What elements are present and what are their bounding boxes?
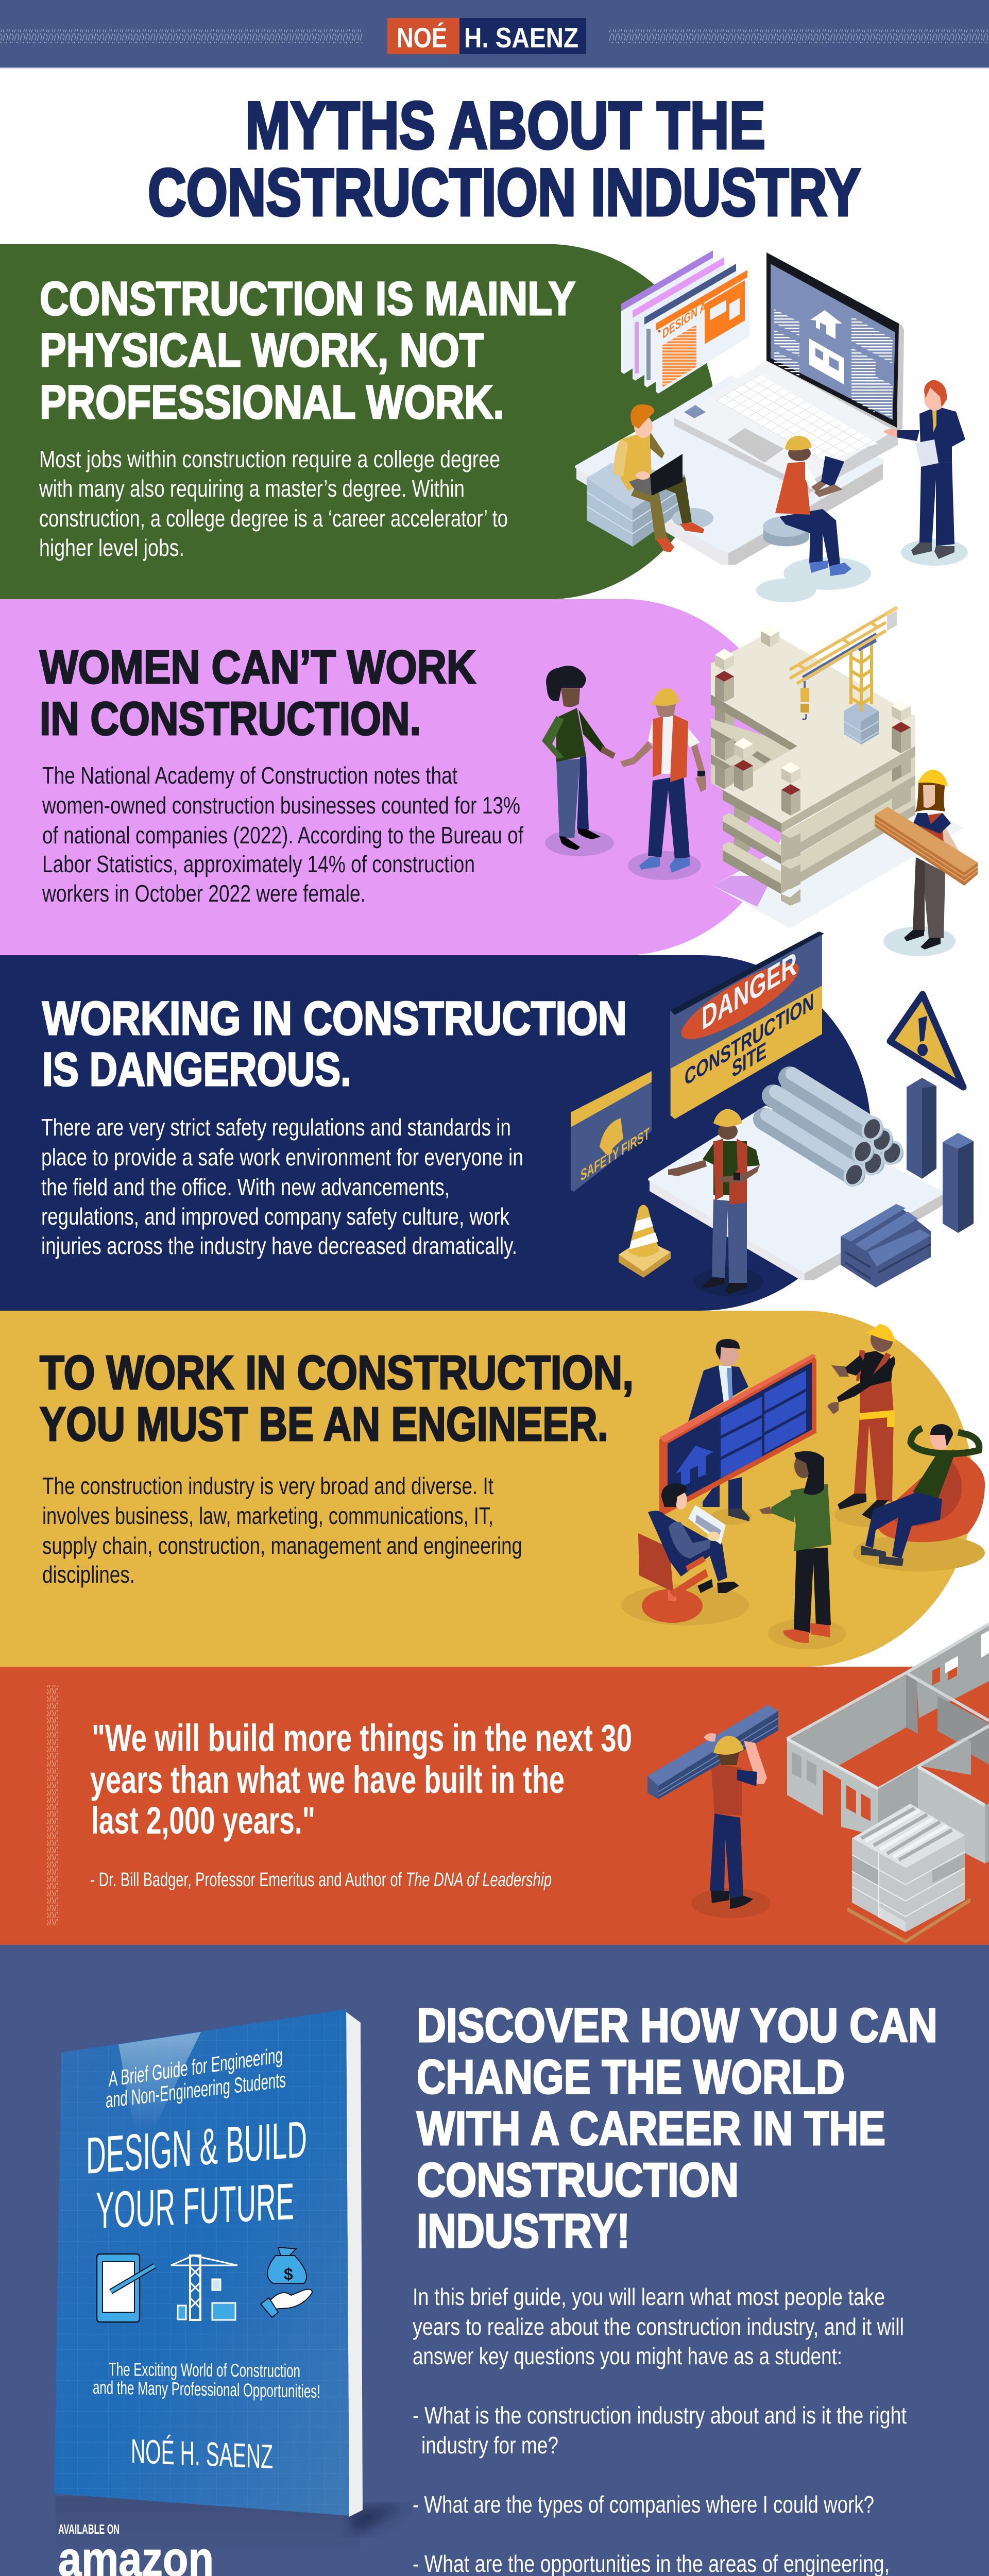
body text: disciplines. (42, 1561, 135, 1588)
body text: construction, a college degree is a ‘career accelerator’ to (39, 505, 508, 532)
body text (39, 446, 508, 561)
material platform (650, 1107, 943, 1280)
body text (42, 762, 523, 907)
heading: CONSTRUCTION (417, 2153, 739, 2207)
notch floor (711, 719, 797, 790)
body text: regulations, and improved company safety culture, work (41, 1203, 510, 1230)
heading: IS DANGEROUS. (42, 1043, 351, 1096)
title (148, 88, 861, 230)
icon: tablet and pencil (97, 2254, 155, 2322)
illustration: project team and display board (621, 1324, 985, 1649)
header logo (387, 18, 586, 54)
top slab (723, 790, 781, 833)
heading: PHYSICAL WORK, NOT (40, 324, 484, 377)
danger sign: CONSTRUCTION (685, 989, 814, 1091)
body text: higher level jobs. (39, 534, 184, 561)
quote attribution: - Dr. Bill Badger, Professor Emeritus and Author of The DNA of Leadership (90, 1869, 552, 1891)
house walls (787, 1624, 989, 1863)
body text: women-owned construction businesses counted for 13% (42, 792, 520, 819)
lower floors (734, 829, 750, 853)
seated worker with tablet (756, 436, 871, 602)
heading: WORKING IN CONSTRUCTION (42, 992, 627, 1045)
panel: women in construction myth (0, 599, 791, 955)
question list: - What are the types of companies where I could work? (413, 2491, 874, 2518)
laptop (674, 252, 904, 494)
design windows: DESIGN A (662, 298, 706, 342)
icon: money bag and hand (261, 2247, 312, 2317)
intro text: In this brief guide, you will learn what most people take (413, 2283, 885, 2310)
heading (40, 273, 575, 429)
display board (659, 1354, 816, 1515)
body text: the field and the office. With new advancements, (41, 1174, 450, 1200)
safety first sign (571, 1071, 652, 1192)
book cover: A Brief Guide for Engineering (109, 2043, 283, 2091)
book cover: The Exciting World of Construction (109, 2359, 300, 2381)
seated person with laptop (587, 404, 713, 552)
panel: quote (0, 1667, 989, 1945)
tower crane (790, 606, 898, 744)
intro text: answer key questions you might have as a student: (413, 2343, 842, 2369)
body text: supply chain, construction, management and engineering (42, 1532, 522, 1559)
woman in green (542, 666, 616, 856)
stacked pipes (764, 1074, 905, 1189)
quote text: "We will build more things in the next 30 (92, 1717, 632, 1759)
safety first sign: SAFETY FIRST (581, 1124, 650, 1184)
body text: involves business, law, marketing, communications, IT, (42, 1502, 493, 1529)
illustration: building site and women (542, 606, 978, 956)
header logo: NOÉ (397, 22, 447, 54)
panel: engineer myth (0, 1311, 974, 1667)
body text: The construction industry is very broad and diverse. It (42, 1472, 493, 1499)
body text: The National Academy of Construction notes that (42, 762, 457, 789)
traffic cone (619, 1205, 671, 1278)
heading: YOU MUST BE AN ENGINEER. (40, 1397, 608, 1451)
body text: place to provide a safe work environment for everyone in (41, 1144, 523, 1171)
question list: industry for me? (421, 2432, 558, 2459)
body text: Most jobs within construction require a college degree (39, 446, 500, 472)
ground shadow (713, 796, 963, 928)
man in orange vest (620, 688, 706, 880)
desk platform (576, 377, 883, 565)
book cover: YOUR FUTURE (96, 2173, 294, 2240)
seated man on chair (621, 1483, 749, 1625)
book cover: and the Many Professional Opportunities! (93, 2377, 320, 2402)
body text: There are very strict safety regulations and standards in (41, 1114, 511, 1141)
heading: INDUSTRY! (417, 2204, 630, 2258)
design windows (621, 250, 750, 394)
standing man in suit (688, 1339, 752, 1525)
quote text (90, 1717, 632, 1842)
header logo: H. SAENZ (464, 22, 578, 54)
heading (42, 992, 627, 1096)
header band (0, 0, 989, 69)
worker in overalls (827, 1324, 907, 1527)
book cover (54, 2009, 407, 2563)
danger sign: DANGER (702, 945, 797, 1038)
heading: PROFESSIONAL WORK. (40, 376, 504, 429)
question list (413, 2402, 907, 2576)
woman carrying timber (875, 770, 978, 956)
body text (42, 1472, 522, 1588)
illustration: laptop team (576, 250, 968, 602)
warning triangle (890, 994, 963, 1087)
icon: crane and blocks (171, 2256, 237, 2320)
heading: CHANGE THE WORLD (417, 2050, 845, 2104)
heading (40, 641, 476, 745)
standing man in suit (883, 380, 968, 566)
woman in green jacket (759, 1451, 846, 1649)
panel: physical work myth (0, 244, 716, 599)
block pallet (847, 1804, 970, 1943)
body text: with many also requiring a master’s degree. Within (39, 475, 465, 502)
icon: money bag and hand: $ (284, 2265, 293, 2283)
illustration: house frame and worker (647, 1624, 989, 1943)
intro text (413, 2283, 904, 2369)
quote text: years than what we have built in the (90, 1758, 565, 1801)
quote text: last 2,000 years." (91, 1799, 315, 1842)
danger sign: SITE (732, 1037, 766, 1083)
book cover: DESIGN & BUILD (86, 2110, 307, 2185)
heading: IN CONSTRUCTION. (40, 693, 421, 745)
illustration: safety signage and materials (571, 931, 974, 1296)
book cover: NOÉ H. SAENZ (131, 2432, 273, 2476)
danger sign (670, 931, 824, 1119)
worker in vest (668, 1109, 764, 1296)
body text: of national companies (2022). According to the Bureau of (42, 822, 523, 849)
beam stack (841, 1204, 931, 1287)
heading: CONSTRUCTION IS MAINLY (40, 273, 575, 325)
body text: Labor Statistics, approximately 14% of construction (42, 851, 475, 877)
body text: injuries across the industry have decreased dramatically. (41, 1232, 517, 1259)
heading: WITH A CAREER IN THE (417, 2102, 885, 2155)
title: MYTHS ABOUT THE (245, 88, 765, 163)
available on label: AVAILABLE ON (58, 2521, 120, 2537)
heading: WOMEN CAN’T WORK (40, 641, 476, 693)
heading (40, 1346, 634, 1451)
building structure (711, 625, 915, 906)
panel: book promotion (0, 1945, 989, 2576)
heading: TO WORK IN CONSTRUCTION, (40, 1346, 634, 1399)
upright steel beams (907, 1078, 974, 1233)
back columns (715, 706, 725, 788)
body text (41, 1114, 523, 1259)
worker carrying beam (647, 1705, 778, 1918)
body text: workers in October 2022 were female. (42, 880, 366, 907)
column stubs (715, 649, 734, 702)
heading (417, 1998, 937, 2258)
relaxed man on beanbag (853, 1424, 985, 1571)
book cover: and Non-Engineering Students (106, 2067, 286, 2112)
panel: dangerous myth (0, 955, 871, 1311)
